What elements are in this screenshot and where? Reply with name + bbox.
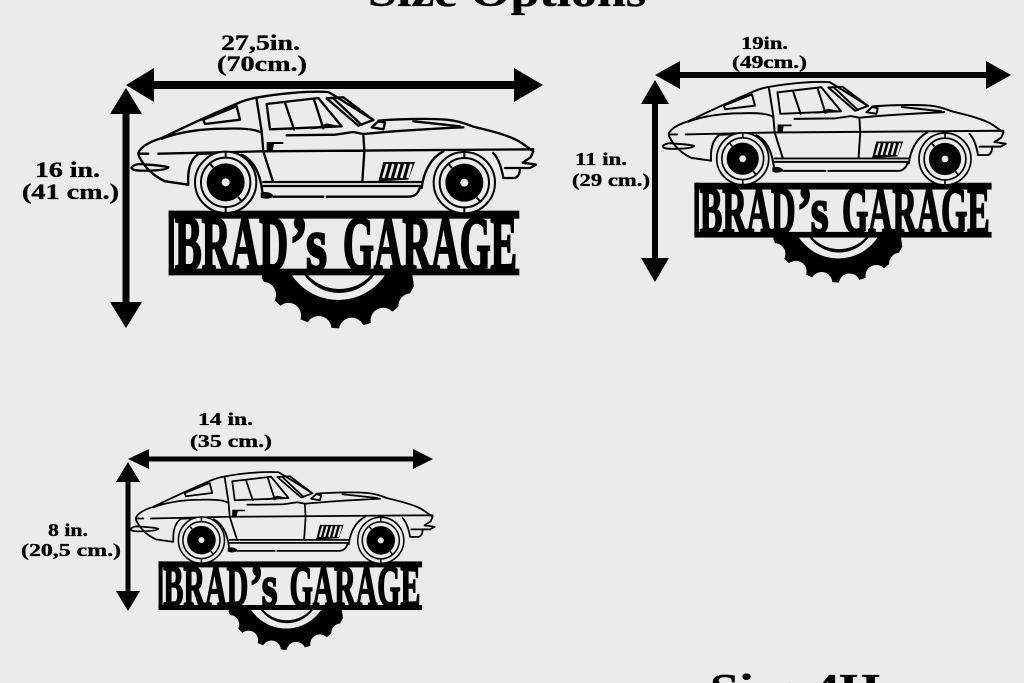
height label large [22, 157, 119, 204]
height label large: (41 cm.) [22, 179, 119, 204]
height arrow large [110, 88, 142, 328]
name plate [159, 553, 422, 618]
width label small: (35 cm.) [190, 431, 272, 452]
car [663, 82, 1006, 185]
side vent [378, 162, 415, 181]
rear wheel [717, 133, 769, 185]
width arrow large [126, 68, 543, 102]
front wheel [434, 152, 495, 213]
name plate [169, 200, 519, 286]
rear wheel [178, 517, 224, 563]
width label medium: (49cm.) [732, 52, 807, 73]
panel: medium size option [572, 33, 1011, 282]
name plate: ’s [250, 553, 278, 618]
width arrow medium [655, 61, 1011, 89]
gear [228, 610, 343, 650]
width label large: 27,5in. [221, 30, 300, 55]
name plate: BRAD [175, 200, 288, 286]
width arrow small [128, 449, 433, 469]
side vent [316, 525, 344, 539]
name plate [694, 175, 992, 247]
name plate: GARAGE [290, 553, 420, 618]
name plate: ’s [797, 175, 829, 247]
height label small [21, 520, 121, 561]
panel: large size option [22, 30, 543, 328]
rear wheel [195, 152, 256, 213]
cabin shadow and door handle [228, 496, 289, 552]
height arrow small [116, 462, 140, 611]
sign large [132, 92, 536, 328]
width label large: (70cm.) [217, 51, 307, 76]
side vent [872, 141, 903, 158]
height label large: 16 in. [35, 157, 100, 182]
width label large [217, 30, 307, 76]
width label medium: 19in. [741, 33, 788, 53]
height label medium [572, 149, 650, 191]
name plate: ’s [290, 200, 327, 286]
front wheel [358, 517, 404, 563]
gear [262, 275, 414, 328]
width label small: 14 in. [198, 409, 253, 429]
sign small [131, 472, 435, 650]
name plate: BRAD [700, 175, 796, 247]
sign medium [663, 82, 1006, 282]
front wheel [919, 133, 971, 185]
car [132, 92, 536, 213]
width label medium [732, 33, 807, 73]
panel: small size option [21, 409, 435, 650]
height arrow medium [641, 80, 669, 282]
car [131, 472, 435, 563]
height label medium: 11 in. [575, 149, 627, 169]
cabin shadow and door handle [772, 109, 841, 173]
height label small: (20,5 cm.) [21, 540, 121, 561]
height label small: 8 in. [48, 520, 88, 540]
cabin shadow and door handle [261, 123, 342, 199]
width label small [190, 409, 272, 452]
name plate: GARAGE [343, 200, 517, 286]
height label medium: (29 cm.) [572, 170, 650, 191]
name plate: BRAD [163, 553, 248, 618]
gear [773, 238, 902, 282]
